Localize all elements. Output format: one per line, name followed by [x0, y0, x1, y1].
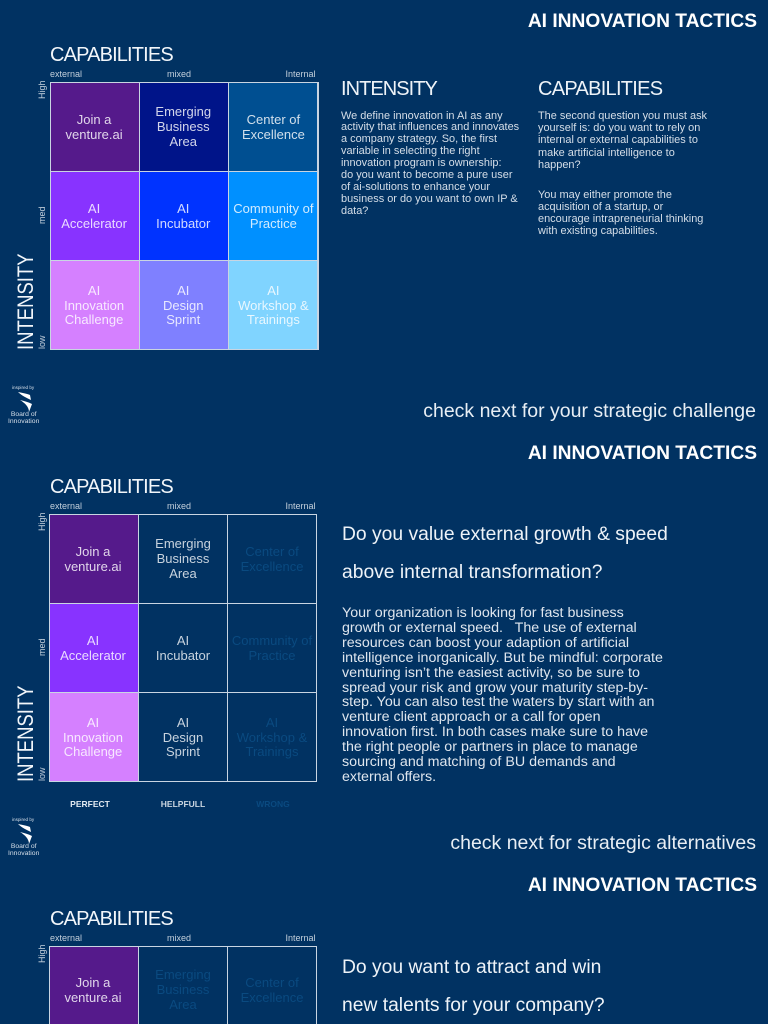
logo: Board of Innovation 1: inspired by — [12, 385, 34, 390]
cell: Emerging Business Area: Business — [157, 119, 210, 134]
cell: AI Incubator: AI — [177, 633, 189, 648]
cell: AI Incubator: Incubator — [156, 648, 210, 663]
cell: AI Innovation Challenge — [51, 261, 139, 349]
cell: AI Incubator — [140, 172, 228, 260]
label: perfect: PERFECT — [70, 799, 110, 809]
cell: Emerging Business Area: Emerging — [155, 104, 211, 119]
cell: Join a venture.ai — [51, 82, 139, 171]
text: intensity description: We define innovation in AI as any — [341, 110, 503, 122]
cell: AI Incubator: Incubator — [156, 216, 210, 231]
cell: AI Workshop & Trainings — [228, 693, 316, 781]
cell: Emerging Business Area: Area — [170, 134, 197, 149]
axis label: high: High — [37, 80, 47, 99]
cell: AI Workshop & Trainings: AI — [266, 715, 278, 730]
text: capabilities description 2: encourage intrapreneurial thinking — [538, 212, 703, 224]
axis label: med: med — [37, 638, 47, 656]
cell: AI Design Sprint — [139, 693, 227, 781]
cell: AI Workshop & Trainings: AI — [267, 283, 280, 298]
heading: capabilities: CAPABILITIES — [50, 908, 173, 930]
cell: Community of Practice — [228, 604, 316, 692]
text: capabilities description 1: happen? — [538, 159, 581, 171]
cell: Emerging Business Area — [140, 82, 228, 171]
matrix grid — [49, 946, 317, 1024]
text: capabilities description 2: acquisition of a startup, or — [538, 200, 663, 212]
text: external growth explanation: innovation first. In both cases make sure to have — [342, 724, 648, 740]
cell: Emerging Business Area: Emerging — [155, 536, 211, 551]
cell: AI Design Sprint: Design — [163, 298, 203, 312]
text: capabilities description 1: make artificial intelligence to — [538, 147, 675, 159]
text: intensity description: activity that influences and innovates — [341, 121, 519, 133]
axis title: intensity: INTENSITY — [12, 253, 38, 350]
cell: AI Accelerator: Accelerator — [61, 216, 127, 231]
cell: AI Innovation Challenge: Innovation — [64, 298, 124, 312]
cell: Community of Practice: Community of — [233, 201, 314, 216]
text: intensity description: data? — [341, 205, 368, 217]
cell: AI Design Sprint: Sprint — [166, 312, 200, 327]
panel: strategy matrix 2 — [12, 476, 317, 782]
axis label: external: external — [50, 933, 82, 943]
text: capabilities description 1: yourself is: do you want to rely on — [538, 122, 700, 134]
cell: AI Innovation Challenge: AI — [87, 715, 99, 730]
cell: AI Accelerator — [50, 604, 138, 692]
logo: Board of Innovation 1: Innovation — [8, 418, 39, 424]
text: capabilities description 2: with existing capabilities. — [538, 224, 658, 236]
cell: Join a venture.ai: Join a — [76, 975, 110, 990]
cell: AI Incubator — [139, 604, 227, 692]
axis label: low: low — [37, 767, 47, 781]
cell: AI Workshop & Trainings — [229, 261, 317, 349]
title: panel 3: AI INNOVATION TACTICS — [528, 875, 757, 896]
text: capabilities description 1: internal or external capabilities to — [538, 134, 698, 146]
panel: strategy matrix 1 — [12, 44, 319, 350]
cell: Center of Excellence: Excellence — [241, 990, 303, 1005]
cell: Join a venture.ai: Join a — [76, 544, 110, 559]
cell: AI Workshop & Trainings: Trainings — [247, 312, 300, 327]
title: panel 1: AI INNOVATION TACTICS — [528, 11, 757, 32]
cell: Community of Practice: Practice — [250, 216, 297, 231]
cell: Join a venture.ai: Join a — [77, 112, 111, 127]
text: intensity description: do you want to become a pure user — [341, 169, 512, 181]
cell: AI Innovation Challenge: Challenge — [65, 312, 123, 327]
cell: Community of Practice: Practice — [248, 648, 295, 663]
cell: AI Innovation Challenge: AI — [88, 283, 100, 298]
cell: Emerging Business Area: Business — [157, 551, 209, 566]
question: external growth: Do you value external growth & speed — [342, 524, 668, 544]
cell: AI Accelerator: Accelerator — [60, 648, 126, 663]
text: external growth explanation: the right people or partners in place to manage — [342, 739, 638, 755]
heading: capabilities: CAPABILITIES — [50, 44, 173, 66]
text: intensity description: innovation program is ownership: — [341, 157, 502, 169]
text: capabilities description 1 — [538, 110, 707, 171]
text: capabilities description 1: The second question you must ask — [538, 110, 707, 122]
cell: Emerging Business Area: Area — [169, 566, 197, 581]
cell: AI Accelerator — [51, 172, 139, 260]
axis label: high: High — [37, 944, 47, 963]
text: external growth explanation: growth or external speed. The use of external — [342, 620, 637, 636]
logo: Board of Innovation 2: Innovation — [8, 850, 39, 856]
cell: Join a venture.ai: venture.ai — [64, 990, 122, 1005]
logo: Board of Innovation 1 — [8, 385, 39, 424]
logo: Board of Innovation 2: inspired by — [12, 817, 34, 822]
panel: strategy matrix 3 — [37, 908, 317, 1024]
cell: Emerging Business Area — [139, 514, 227, 603]
axis label: high: High — [37, 512, 47, 531]
cell: Join a venture.ai — [50, 514, 138, 603]
axis label: low: low — [37, 335, 47, 349]
logo: Board of Innovation 2: Board of — [11, 843, 37, 850]
label: wrong: WRONG — [256, 799, 290, 809]
cell: Center of Excellence: Excellence — [242, 127, 305, 142]
question: attract talent: new talents for your company? — [342, 995, 605, 1016]
axis label: mixed: mixed — [167, 501, 191, 511]
cell: AI Innovation Challenge: Innovation — [63, 730, 123, 744]
cell: AI Design Sprint: Design — [163, 730, 203, 744]
matrix grid — [50, 82, 318, 350]
text: external growth explanation: Your organization is looking for fast business — [342, 605, 624, 621]
cell: Center of Excellence — [228, 514, 316, 603]
axis label: mixed: mixed — [167, 933, 191, 943]
cell: Center of Excellence: Center of — [245, 975, 299, 990]
text: external growth explanation: external offers. — [342, 769, 436, 785]
matrix grid — [49, 514, 317, 782]
cell: Community of Practice: Community of — [232, 633, 312, 648]
text: intensity description: of ai-solutions to enhance your — [341, 181, 490, 193]
question: attract talent — [342, 956, 605, 1016]
text: external growth explanation: venture client approach or a call for open — [342, 709, 601, 725]
cell: Emerging Business Area: Business — [157, 982, 209, 997]
text: intensity description: variable in selecting the right — [341, 145, 480, 157]
cell: AI Accelerator: AI — [88, 201, 100, 216]
cell: AI Design Sprint: AI — [177, 283, 189, 298]
heading: capabilities: CAPABILITIES — [50, 476, 173, 498]
cell: Emerging Business Area: Emerging — [155, 967, 211, 982]
axis label: mixed: mixed — [167, 69, 191, 79]
heading: intensity: INTENSITY — [341, 78, 437, 100]
cell: AI Workshop & Trainings: Trainings — [246, 744, 298, 759]
cell: Emerging Business Area — [139, 946, 227, 1024]
text: intensity description: a company strategy. So, the first — [341, 133, 497, 145]
axis label: internal: Internal — [286, 501, 316, 511]
cell: Center of Excellence: Center of — [245, 544, 299, 559]
cell: Center of Excellence — [229, 82, 317, 171]
title: panel 2: AI INNOVATION TACTICS — [528, 443, 757, 464]
axis label: external: external — [50, 69, 82, 79]
text: intensity description: business or do you want to own IP & — [341, 193, 518, 205]
link text: next strategic challenge: check next for your strategic challenge — [423, 400, 756, 422]
cell: AI Workshop & Trainings: Workshop & — [237, 730, 307, 744]
cell: Join a venture.ai: venture.ai — [64, 559, 122, 574]
cell: Emerging Business Area: Area — [169, 997, 197, 1012]
text: external growth explanation: sourcing and matching of BU demands and — [342, 754, 616, 770]
cell: AI Design Sprint: Sprint — [166, 744, 200, 759]
cell: AI Innovation Challenge — [50, 693, 138, 781]
text: capabilities description 2: You may either promote the — [538, 188, 672, 200]
axis label: external: external — [50, 501, 82, 511]
text: external growth explanation: resources can boost your adaption of artificial — [342, 635, 629, 651]
link text: next strategic alternatives: check next for strategic alternatives — [450, 832, 756, 854]
question: external growth — [342, 524, 668, 583]
axis label: internal: Internal — [286, 933, 316, 943]
question: attract talent: Do you want to attract and win — [342, 956, 601, 978]
text: intensity description — [341, 110, 519, 217]
cell: AI Accelerator: AI — [87, 633, 99, 648]
text: external growth explanation — [342, 605, 663, 785]
cell: Center of Excellence — [228, 946, 316, 1024]
text: external growth explanation: intelligence inorganically. But be mindful: corporate — [342, 650, 663, 666]
cell: AI Workshop & Trainings: Workshop & — [238, 298, 309, 312]
cell: AI Innovation Challenge: Challenge — [64, 744, 122, 759]
text: external growth explanation: venturing isn’t the easiest activity, so be sure to — [342, 665, 640, 681]
cell: AI Design Sprint: AI — [177, 715, 189, 730]
cell: Center of Excellence: Center of — [247, 112, 300, 127]
cell: Center of Excellence: Excellence — [241, 559, 303, 574]
cell: AI Design Sprint — [140, 261, 228, 349]
cell: Join a venture.ai — [50, 946, 138, 1024]
cell: AI Incubator: AI — [177, 201, 189, 216]
question: external growth: above internal transformation? — [342, 562, 602, 583]
cell: Join a venture.ai: venture.ai — [66, 127, 123, 142]
axis label: med: med — [37, 206, 47, 224]
axis title: intensity: INTENSITY — [12, 685, 38, 782]
text: capabilities description 2 — [538, 188, 703, 236]
logo: Board of Innovation 1: Board of — [11, 411, 37, 418]
heading: capabilities: CAPABILITIES — [538, 78, 662, 100]
label: helpfull: HELPFULL — [161, 799, 205, 809]
axis label: internal: Internal — [286, 69, 316, 79]
text: external growth explanation: step. You can also test the waters by start with an — [342, 694, 654, 710]
logo: Board of Innovation 2 — [8, 817, 39, 856]
text: external growth explanation: spread your risk and grow your maturity step-by- — [342, 680, 648, 696]
cell: Community of Practice — [229, 172, 317, 260]
